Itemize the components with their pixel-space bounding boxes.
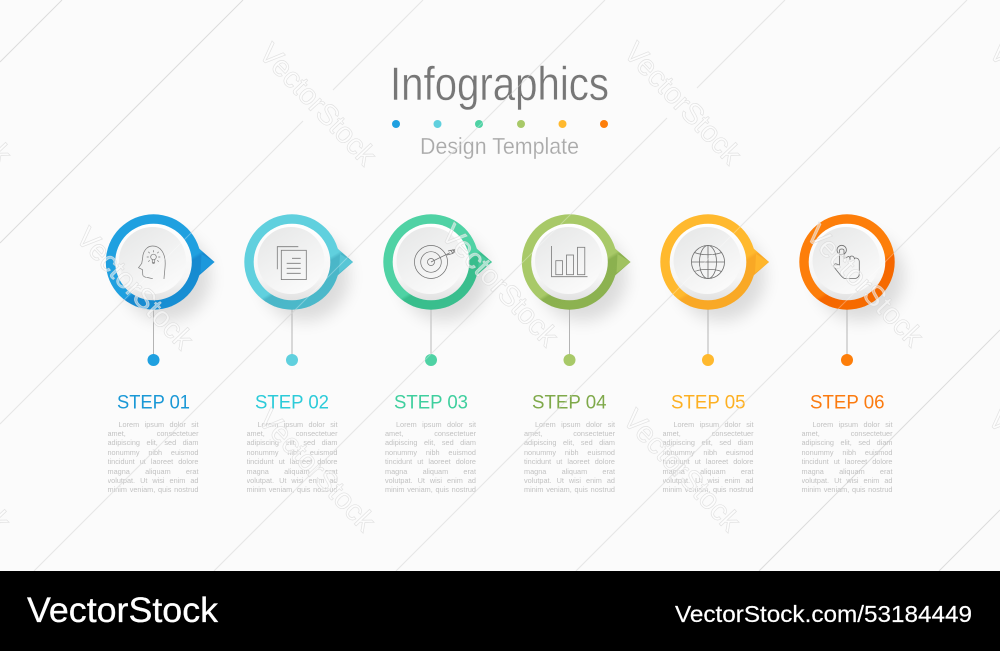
watermarks: VectorStock	[617, 37, 747, 171]
step 5 body text: tincidunt ut laoreet dolore	[662, 457, 754, 466]
step 5 body text: nonummy nibh euismod	[662, 448, 754, 457]
step 5 heading: STEP 05	[671, 392, 746, 414]
step 2 body text: adipiscing elit, sed diam	[246, 438, 338, 447]
step 6 heading: STEP 06	[810, 392, 884, 414]
step 5 body text: Lorem ipsum dolor sit	[674, 420, 754, 428]
step 4 body text: magna aliquam erat	[524, 467, 615, 476]
footer bar	[0, 571, 1000, 651]
step 2 body text: magna aliquam erat	[246, 467, 338, 476]
step 2 body text	[246, 420, 338, 494]
step 5 body text	[662, 420, 754, 494]
step 6 body text: tincidunt ut laoreet dolore	[802, 457, 892, 466]
step 4 body text: minim veniam, quis nostrud	[524, 485, 615, 494]
step 1 heading: STEP 01	[117, 392, 190, 414]
step 6 body text: magna aliquam erat	[802, 467, 892, 476]
step 2 body text: Lorem ipsum dolor sit	[258, 420, 338, 428]
step 4 heading: STEP 04	[532, 392, 607, 414]
icon: head with light bulb	[138, 246, 165, 279]
title: Infographics	[390, 57, 609, 110]
step 6 badge	[799, 214, 904, 366]
step 4 body text	[524, 420, 615, 494]
step 5 body text: adipiscing elit, sed diam	[662, 438, 754, 447]
step 1 badge	[106, 214, 214, 366]
step 6 body text: Lorem ipsum dolor sit	[812, 420, 892, 428]
icon: documents	[277, 247, 306, 280]
step 1 body text: volutpat. Ut wisi enim ad	[108, 476, 198, 485]
step 3 body text: Lorem ipsum dolor sit	[396, 420, 476, 428]
step 5 body text: minim veniam, quis nostrud	[662, 485, 754, 494]
step 6 body text: nonummy nibh euismod	[802, 448, 892, 457]
step 2 body text: nonummy nibh euismod	[246, 448, 338, 457]
step 4 body text: volutpat. Ut wisi enim ad	[524, 476, 615, 485]
subtitle: Design Template	[420, 133, 579, 159]
step 2 badge	[244, 214, 353, 366]
icon: globe	[692, 246, 724, 278]
step 1 body text: amet, consectetuer	[108, 429, 198, 438]
step 3 body text: minim veniam, quis nostrud	[385, 485, 476, 494]
step 1 body text: adipiscing elit, sed diam	[108, 438, 198, 447]
step 5 body text: volutpat. Ut wisi enim ad	[662, 476, 754, 485]
watermarks: VectorStock	[69, 222, 199, 356]
step 3 body text: volutpat. Ut wisi enim ad	[385, 476, 476, 485]
step 4 body text: adipiscing elit, sed diam	[524, 438, 615, 447]
step 4 body text: amet, consectetuer	[524, 429, 615, 438]
step 3 body text	[385, 420, 476, 494]
step 4 badge	[522, 214, 630, 366]
step 3 badge	[383, 214, 492, 366]
step 2 heading: STEP 02	[255, 392, 329, 414]
step 1 body text: nonummy nibh euismod	[108, 448, 198, 457]
step 4 body text: nonummy nibh euismod	[524, 448, 615, 457]
step 1 body text: tincidunt ut laoreet dolore	[108, 457, 198, 466]
step 3 body text: adipiscing elit, sed diam	[385, 438, 476, 447]
step 4 body text: Lorem ipsum dolor sit	[535, 420, 615, 428]
step 6 body text: minim veniam, quis nostrud	[802, 485, 892, 494]
footer image id: VectorStock.com/53184449	[675, 601, 972, 627]
step 3 body text: magna aliquam erat	[385, 467, 476, 476]
footer brand: VectorStock	[27, 591, 219, 630]
step 6 body text: adipiscing elit, sed diam	[802, 438, 892, 447]
watermarks: VectorStock	[434, 219, 564, 353]
watermarks: VectorStock	[799, 219, 929, 353]
step 6 body text	[802, 420, 892, 494]
watermarks	[0, 37, 1000, 538]
step 4 body text: tincidunt ut laoreet dolore	[524, 457, 615, 466]
step 2 body text: amet, consectetuer	[246, 429, 338, 438]
icon: target with arrow	[414, 246, 455, 278]
watermarks: VectorStock	[252, 38, 382, 172]
step 1 body text: magna aliquam erat	[108, 467, 198, 476]
step 5 badge	[660, 214, 769, 366]
step 3 body text: amet, consectetuer	[385, 429, 476, 438]
title colour dots	[392, 120, 608, 128]
step 5 body text: amet, consectetuer	[662, 429, 754, 438]
step 5 body text: magna aliquam erat	[662, 467, 754, 476]
watermarks: VectorStock	[251, 404, 381, 538]
step 1 body text: Lorem ipsum dolor sit	[118, 420, 198, 428]
watermarks: VectorStock	[616, 404, 746, 538]
step 3 body text: tincidunt ut laoreet dolore	[385, 457, 476, 466]
step 3 heading: STEP 03	[394, 392, 468, 414]
step 2 body text: volutpat. Ut wisi enim ad	[246, 476, 338, 485]
icon: bar chart	[552, 246, 588, 277]
step 2 body text: minim veniam, quis nostrud	[246, 485, 338, 494]
icon: pointing hand	[834, 245, 859, 278]
step 1 body text: minim veniam, quis nostrud	[108, 485, 198, 494]
step 2 body text: tincidunt ut laoreet dolore	[246, 457, 338, 466]
step 6 body text: amet, consectetuer	[802, 429, 892, 438]
step 6 body text: volutpat. Ut wisi enim ad	[802, 476, 892, 485]
step 1 body text	[108, 420, 198, 494]
step 3 body text: nonummy nibh euismod	[385, 448, 476, 457]
